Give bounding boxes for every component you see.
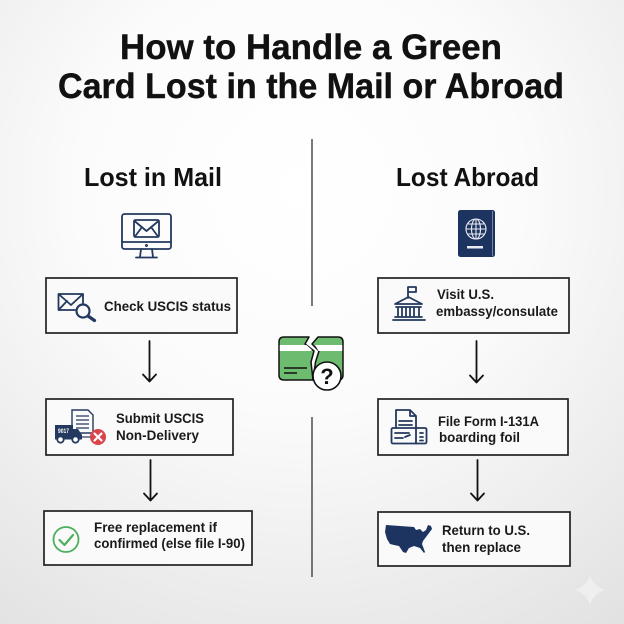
title bbox=[58, 28, 564, 106]
step: visit embassy bbox=[378, 278, 569, 333]
step text: embassy/consulate bbox=[436, 303, 558, 319]
icon: monitor with envelope bbox=[122, 214, 171, 258]
step: check USCIS status bbox=[46, 278, 237, 333]
step: free replacement bbox=[44, 511, 252, 565]
icon: embassy building bbox=[393, 287, 425, 320]
step: file form I-131A bbox=[378, 399, 568, 455]
step text bbox=[438, 413, 539, 445]
step text: Free replacement if bbox=[94, 519, 217, 535]
decorative sparkle bbox=[575, 575, 605, 605]
step: submit USCIS non-delivery bbox=[46, 399, 233, 455]
step text: boarding foil bbox=[439, 429, 520, 445]
step text bbox=[436, 286, 558, 319]
step text bbox=[442, 522, 530, 555]
step text bbox=[116, 410, 204, 443]
panel: lost abroad bbox=[378, 162, 570, 566]
step text: Non-Delivery bbox=[116, 427, 199, 443]
step text: Return to U.S. bbox=[442, 522, 530, 538]
step text: File Form I-131A bbox=[438, 413, 539, 429]
icon: truck, document and red x: 9017 bbox=[58, 429, 70, 435]
step text: then replace bbox=[442, 539, 521, 555]
step text: Visit U.S. bbox=[437, 286, 494, 302]
step text bbox=[94, 519, 245, 551]
step: return to U.S. bbox=[378, 512, 570, 566]
arrow bbox=[144, 460, 157, 500]
arrow bbox=[471, 460, 484, 500]
step text: Submit USCIS bbox=[116, 410, 204, 426]
title: Card Lost in the Mail or Abroad bbox=[58, 67, 564, 106]
icon: envelope with magnifier bbox=[58, 294, 94, 320]
icon: truck, document and red x bbox=[55, 410, 106, 445]
title: How to Handle a Green bbox=[120, 28, 502, 67]
icon: form and boarding foil bbox=[392, 410, 426, 444]
arrow bbox=[143, 341, 156, 382]
arrow bbox=[470, 341, 483, 382]
center divider, lower bbox=[311, 417, 313, 577]
step text: confirmed (else file I-90) bbox=[94, 535, 245, 551]
icon: passport bbox=[458, 210, 495, 257]
icon: broken green card with question mark bbox=[279, 337, 343, 390]
center divider, upper bbox=[311, 139, 313, 306]
icon: US map bbox=[385, 525, 432, 553]
icon: green check circle bbox=[54, 527, 78, 552]
icon: broken green card with question mark: ? bbox=[320, 364, 334, 389]
heading: lost abroad: Lost Abroad bbox=[396, 162, 539, 192]
heading: lost in mail: Lost in Mail bbox=[84, 162, 222, 192]
panel: lost in mail bbox=[44, 162, 252, 565]
step text: Check USCIS status bbox=[104, 298, 231, 314]
